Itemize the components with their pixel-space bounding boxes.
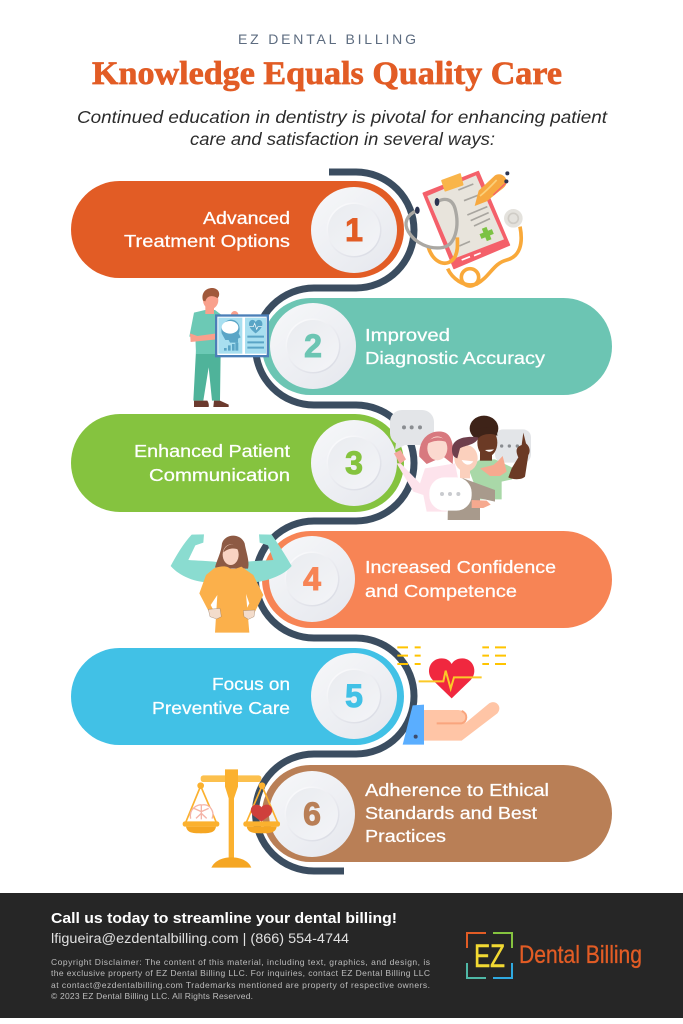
- logo: Dental Billing: [519, 941, 642, 969]
- number plate 1: 1: [345, 212, 363, 248]
- number plate 6: [269, 771, 355, 857]
- step 3 label: Communication: [149, 465, 290, 485]
- copyright disclaimer: [51, 957, 430, 1001]
- step 1 label: Treatment Options: [124, 231, 290, 251]
- step 5 label: [152, 674, 290, 718]
- step 4 label: Increased Confidence: [365, 557, 556, 577]
- step 2 label: Improved: [365, 325, 450, 345]
- number plate 3: [311, 420, 397, 506]
- intro text: Continued education in dentistry is pivotal for enhancing patient: [77, 107, 608, 127]
- step 6 label: Standards and Best: [365, 803, 537, 823]
- step 2 label: Diagnostic Accuracy: [365, 348, 545, 368]
- step 6 label: Practices: [365, 826, 446, 846]
- step 4 label: [365, 557, 556, 601]
- step 6 label: Adherence to Ethical: [365, 780, 549, 800]
- brand heading: EZ DENTAL BILLING: [238, 31, 416, 47]
- copyright disclaimer: Copyright Disclaimer: The content of this material, including text, graphics, and design, is: [51, 957, 430, 967]
- number plate 1: [311, 187, 397, 273]
- call to action: Call us today to streamline your dental billing!: [51, 910, 397, 927]
- number plate 3: 3: [345, 445, 363, 481]
- panel: step 4: [262, 531, 612, 628]
- copyright disclaimer: © 2023 EZ Dental Billing LLC. All Rights Reserved.: [51, 991, 253, 1001]
- icon: group of people talking: [390, 410, 531, 520]
- icon: clipboard and stethoscope: [406, 171, 523, 286]
- number plate 4: [269, 536, 355, 622]
- logo: EZ: [474, 938, 505, 974]
- copyright disclaimer: at contact@ezdentalbilling.com Trademarks mentioned are property of respective owners.: [51, 980, 430, 990]
- number plate 5: 5: [345, 678, 363, 714]
- title: Knowledge Equals Quality Care: [92, 56, 562, 92]
- panel: footer: [0, 893, 683, 1018]
- step 1 label: Advanced: [203, 208, 290, 228]
- copyright disclaimer: the exclusive property of EZ Dental Billing LLC. For inquiries, contact EZ Dental Billing LLC: [51, 968, 430, 978]
- icon: doctor holding board: [189, 288, 269, 407]
- step 5 label: Focus on: [212, 674, 290, 694]
- icon: hand holding heart: [397, 647, 506, 745]
- icon: balance scale: [183, 769, 280, 868]
- step 3 label: Enhanced Patient: [134, 441, 290, 461]
- number plate 6: 6: [303, 796, 321, 832]
- step 2 label: [365, 325, 545, 368]
- panel: step 5: [71, 648, 404, 745]
- step 4 label: and Competence: [365, 581, 517, 601]
- logo: [467, 933, 642, 978]
- panel: step 1: [71, 181, 404, 278]
- step 6 label: [365, 780, 549, 846]
- number plate 5: [311, 653, 397, 739]
- number plate 4: 4: [303, 561, 321, 597]
- number plate 2: 2: [304, 328, 322, 364]
- contact details: lfigueira@ezdentalbilling.com | (866) 554-4744: [51, 930, 349, 946]
- intro text: care and satisfaction in several ways:: [190, 129, 495, 149]
- step 1 label: [124, 208, 290, 251]
- intro text: [77, 107, 608, 149]
- panel: step 6: [262, 765, 612, 862]
- connector path: [256, 172, 414, 871]
- icon: woman with strong arms: [171, 534, 292, 633]
- step 3 label: [134, 441, 290, 485]
- panel: step 3: [71, 414, 404, 512]
- step 5 label: Preventive Care: [152, 698, 290, 718]
- number plate 2: [270, 303, 356, 389]
- panel: step 2: [262, 298, 612, 395]
